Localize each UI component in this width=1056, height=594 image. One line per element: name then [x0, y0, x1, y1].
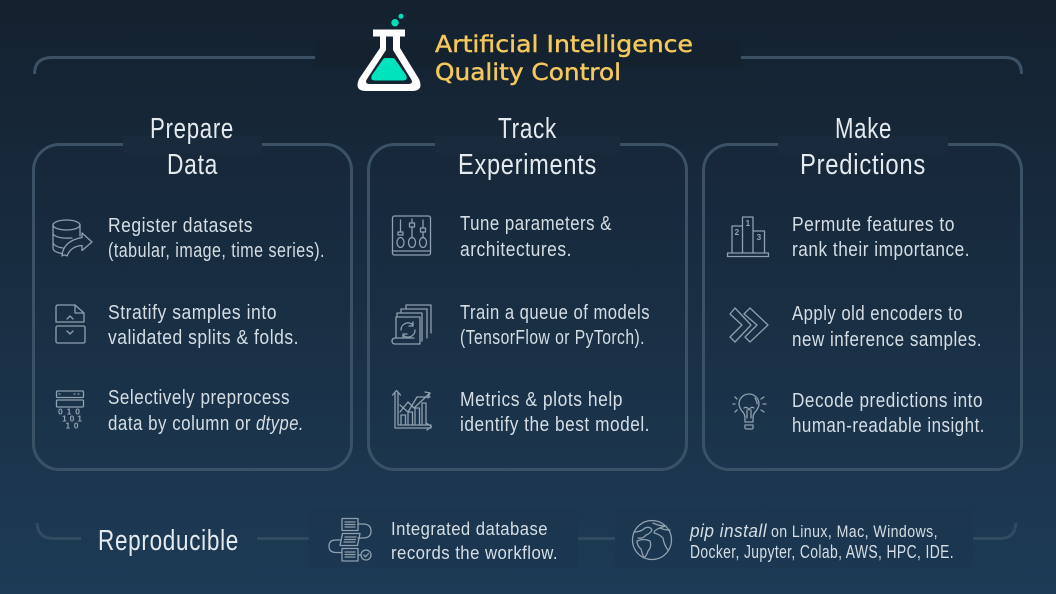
icon: globe: [632, 520, 672, 560]
heading: Make Predictions: [800, 113, 926, 181]
icon: stack of pages: [392, 305, 431, 344]
top frame line: [34, 58, 1022, 74]
text: integrated database: records the workflow.: [391, 542, 558, 563]
panel: Make Predictions: [704, 113, 1022, 470]
heading: Prepare Data: Data: [167, 149, 218, 181]
text: permute features: [792, 214, 970, 261]
title text: Artificial Intelligence: [435, 32, 693, 58]
icon: podium: [728, 217, 768, 256]
text: apply old encoders: new inference samples.: [792, 329, 982, 351]
icon: light bulb: [733, 394, 766, 429]
footer band: workflow backing: [308, 510, 578, 568]
icon: sliders: [392, 216, 430, 255]
icon: server with binary digits: 101: [62, 414, 82, 424]
heading: Make Predictions: Predictions: [800, 149, 926, 181]
text: integrated database: [391, 518, 558, 563]
text: register datasets: (tabular, image, time series).: [108, 240, 325, 262]
text: tune parameters: Tune parameters &: [460, 213, 612, 235]
text: train a queue: [460, 302, 650, 349]
icon: database with arrow: [53, 220, 92, 256]
text: register datasets: Register datasets: [108, 215, 253, 237]
text: selectively preprocess: Selectively preprocess: [108, 387, 290, 409]
header: logo and title: [315, 14, 741, 91]
bottom frame line: [37, 523, 1016, 538]
text: tune parameters: architectures.: [460, 239, 572, 261]
text: decode predictions: human-readable insight.: [792, 415, 985, 437]
title text: Quality Control: [435, 60, 621, 86]
icon: split document: [56, 305, 85, 343]
icon: server with binary digits: [56, 391, 84, 430]
heading: Prepare Data: Prepare: [150, 113, 234, 145]
text: apply old encoders: [792, 303, 982, 351]
text: stratify samples: Stratify samples into: [108, 302, 277, 324]
text: metrics and plots: [460, 389, 650, 436]
icon: podium: 3: [756, 232, 762, 242]
footer label: Reproducible: Reproducible: [98, 525, 239, 557]
text: permute features: rank their importance.: [792, 239, 970, 261]
text: pip install platforms: pip install: [689, 520, 767, 541]
icon: podium: 1: [746, 218, 750, 228]
text: stratify samples: validated splits & folds.: [108, 327, 299, 349]
text: selectively preprocess: data by column or: [108, 413, 251, 435]
heading: Track Experiments: Experiments: [458, 149, 597, 181]
text: stratify samples: [108, 302, 299, 349]
text: decode predictions: [792, 390, 985, 437]
panel: Track Experiments: [368, 113, 686, 470]
heading: Track Experiments: Track: [498, 113, 557, 145]
icon: server with binary digits: 010: [58, 406, 80, 416]
text: metrics and plots: Metrics & plots help: [460, 389, 623, 411]
icon: flask logo: [358, 14, 420, 91]
text: apply old encoders: Apply old encoders to: [792, 303, 963, 325]
text: pip install platforms: [689, 520, 954, 562]
icon: metrics chart: [392, 390, 432, 430]
text: tune parameters: [460, 213, 612, 261]
icon: workflow documents: [329, 518, 371, 561]
text: pip install platforms: on Linux, Mac, Windows,: [771, 522, 938, 541]
text: train a queue: (TensorFlow or PyTorch).: [460, 327, 645, 349]
text: register datasets: [108, 215, 325, 262]
title text: [435, 32, 693, 86]
text: selectively preprocess: dtype.: [256, 413, 304, 435]
heading: Track Experiments: [458, 113, 597, 181]
heading: Make Predictions: Make: [835, 113, 892, 145]
text: permute features: Permute features to: [792, 214, 955, 236]
icon: podium: 2: [734, 227, 740, 237]
heading: Prepare Data: [150, 113, 234, 181]
icon: server with binary digits: 10: [66, 420, 79, 430]
text: decode predictions: Decode predictions into: [792, 390, 983, 412]
text: pip install platforms: Docker, Jupyter, Colab, AWS, HPC, IDE.: [690, 541, 954, 562]
text: train a queue: Train a queue of models: [460, 302, 650, 324]
panel: Prepare Data: [34, 113, 352, 470]
text: integrated database: Integrated database: [391, 518, 548, 539]
text: metrics and plots: identify the best model.: [460, 414, 650, 436]
icon: double chevrons: [730, 308, 768, 342]
footer band: install backing: [615, 510, 973, 568]
text: selectively preprocess: [108, 387, 304, 435]
